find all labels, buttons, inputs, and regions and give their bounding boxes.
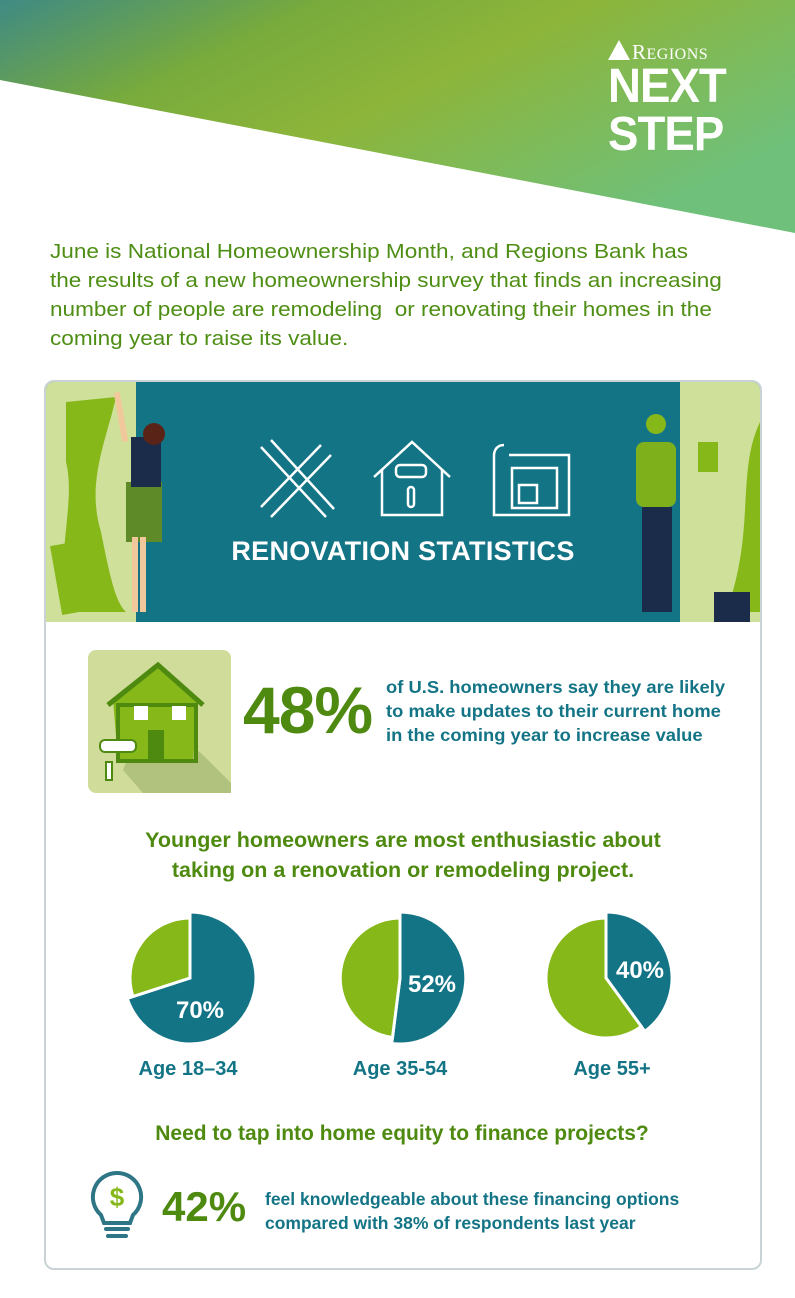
logo: Regions Next Step: NEXT (608, 60, 726, 113)
icon: lightbulb dollar (90, 1171, 144, 1238)
description: to make updates to their current home (386, 701, 721, 721)
pie 35-54: 52% (408, 971, 456, 998)
big number 48%: 48% (243, 673, 372, 747)
pie 18-34: Age 18–34 (139, 1058, 238, 1080)
header gradient band (0, 0, 795, 233)
intro text: coming year to raise its value. (50, 327, 348, 350)
logo: Regions Next Step: REGIONS (632, 40, 708, 64)
description: in the coming year to increase value (386, 725, 703, 745)
intro text: number of people are remodeling or renovating their homes in the (50, 298, 712, 321)
pie 18-34: 70% (176, 997, 224, 1024)
pie 35-54 (340, 912, 466, 1080)
icon: lightbulb dollar: $ (110, 1182, 125, 1212)
intro text (50, 240, 722, 350)
icons: tools, house roller, blueprint (260, 439, 570, 518)
main panel (44, 380, 762, 1270)
big number 42%: 42% (162, 1183, 246, 1230)
logo: Regions Next Step (608, 40, 726, 161)
illustration: woman wallpapering (46, 382, 165, 622)
equity description: compared with 38% of respondents last year (265, 1213, 636, 1233)
pie 55+ (546, 912, 672, 1080)
description (386, 677, 725, 745)
pie 18-34 (127, 912, 256, 1080)
equity description (265, 1189, 679, 1233)
stat 48% block (88, 650, 725, 793)
banner title: RENOVATION STATISTICS (231, 536, 575, 566)
pie 55+: Age 55+ (573, 1058, 651, 1080)
pie charts by age (129, 914, 671, 1080)
pie 35-54: Age 35-54 (353, 1058, 448, 1080)
subheading: younger homeowners (145, 828, 661, 882)
icon: green house (88, 650, 231, 793)
pie 55+: 40% (616, 957, 664, 984)
banner: renovation statistics (46, 382, 760, 622)
subheading: younger homeowners: taking on a renovation or remodeling project. (172, 858, 634, 882)
equity description: feel knowledgeable about these financing options (265, 1189, 679, 1209)
illustration: man painting (636, 382, 760, 622)
subheading: home equity: Need to tap into home equity to finance projects? (155, 1122, 649, 1145)
subheading: younger homeowners: Younger homeowners are most enthusiastic about (145, 828, 661, 852)
description: of U.S. homeowners say they are likely (386, 677, 725, 697)
logo: Regions Next Step: STEP (608, 108, 723, 161)
intro text: the results of a new homeownership survey that finds an increasing (50, 269, 722, 292)
intro text: June is National Homeownership Month, and Regions Bank has (50, 240, 688, 263)
